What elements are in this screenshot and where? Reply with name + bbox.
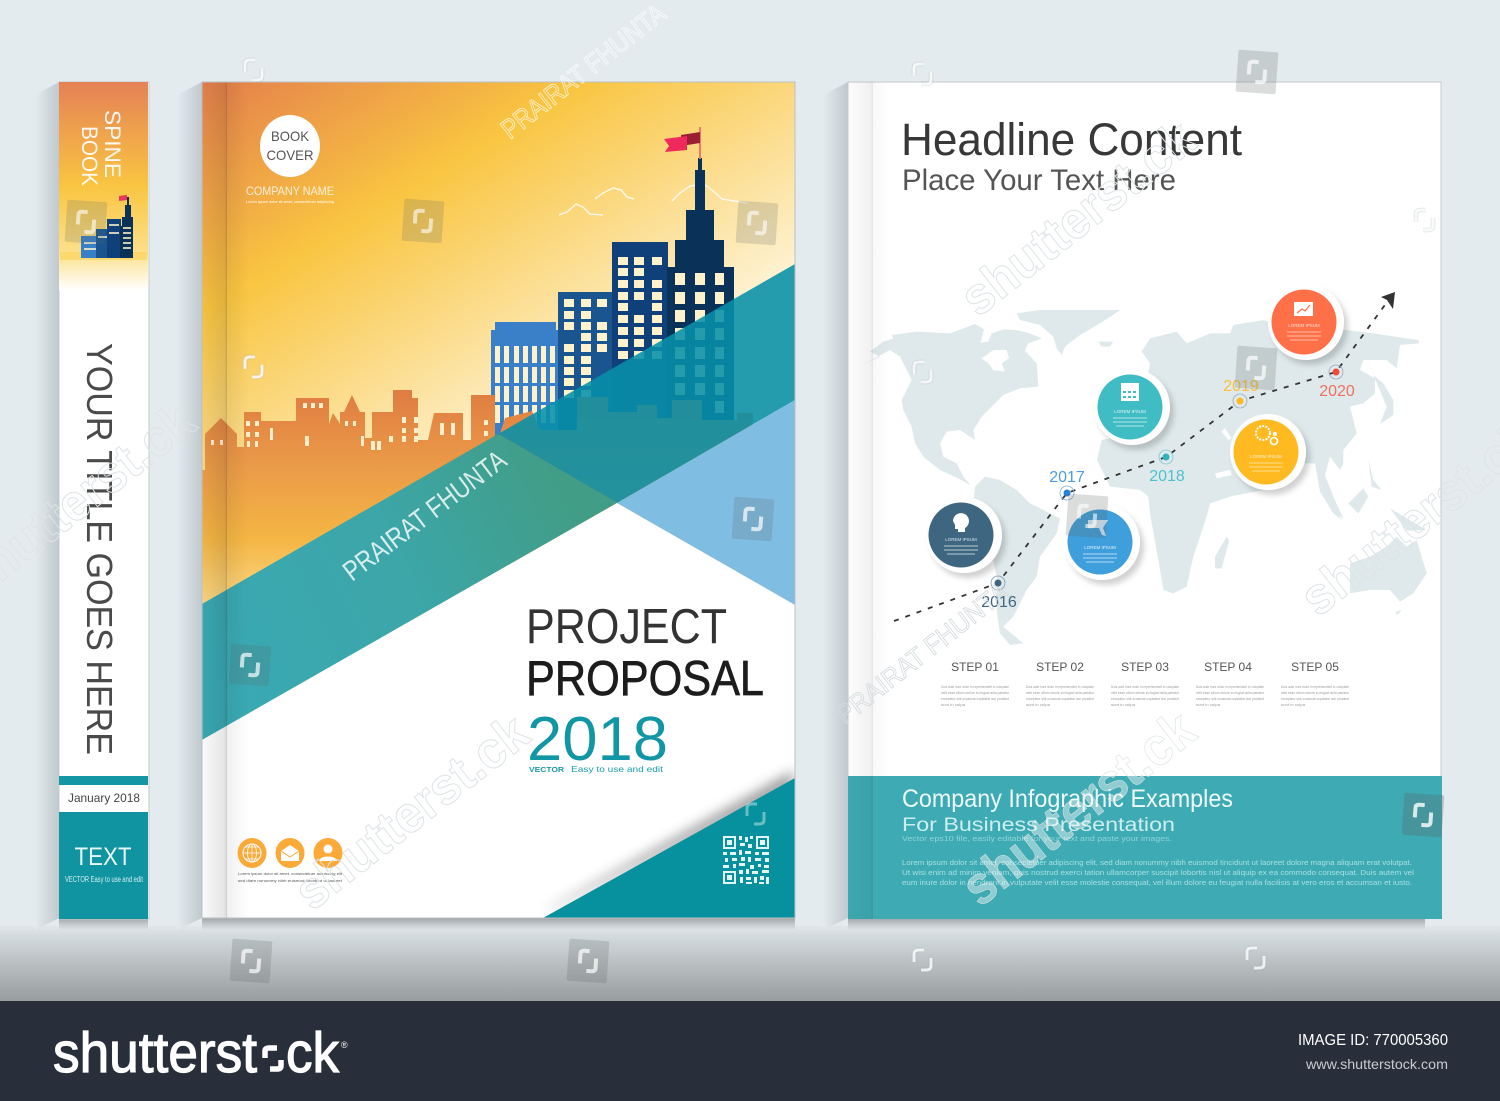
lower sky gradient (202, 470, 802, 620)
fold shadow (543, 770, 795, 912)
step descriptions: Duis aute irure dolor in reprehenderit in voluptate (941, 684, 1010, 689)
subheadline: Place Your Text Here (902, 164, 1176, 197)
step descriptions: velit esse cillum dolore eu fugiat nulla pariatur (941, 690, 1010, 695)
book shadows (35, 82, 1425, 930)
spine gradient header (59, 82, 148, 290)
step circle: yellow: LOREM IPSUM (1250, 454, 1282, 459)
footer paragraph: eum iriure dolor in hendrerit in vulputate velit esse molestie consequat, vel illum dolore eu feugiat nulla facilisis at vero eros et accumsan et iusto. (902, 878, 1412, 887)
panel: inside page (848, 82, 1442, 919)
step circle: orange (1268, 284, 1344, 360)
step descriptions: sunt in culpa (1026, 702, 1051, 707)
city: navy building (612, 242, 668, 432)
watermark text: shutterst.ck (950, 698, 1207, 917)
map: americas and greenland (862, 310, 1121, 645)
step descriptions: velit esse cillum dolore eu fugiat nulla pariatur (1196, 690, 1265, 695)
footer paragraph: Lorem ipsum dolor sit amet, consectetuer adipiscing elit, sed diam nonummy nibh euismod tincidunt ut laoreet dolore magna aliquam erat volutpat. (902, 858, 1412, 867)
icon: globe (238, 838, 266, 868)
contact text (238, 872, 342, 883)
white lower panel (202, 503, 795, 918)
company name (246, 186, 334, 204)
blue triangle (617, 400, 795, 605)
front cover border (202, 82, 795, 918)
spine heading: spine book: BOOK (77, 126, 102, 186)
footer logo: shutterst (53, 1021, 257, 1085)
year labels: 2020 (1319, 383, 1355, 400)
step circle: navy (926, 497, 1002, 573)
step circle: navy: LOREM IPSUM (945, 537, 977, 542)
timeline marker 2020 (1329, 365, 1343, 379)
headline: Headline Content (901, 114, 1242, 165)
contact text: sed diam nonummy nibh euismod tincidunt ut laoreet (238, 878, 343, 883)
band watermark text: PRAIRAT FHUNTA (337, 444, 512, 587)
step descriptions: velit esse cillum dolore eu fugiat nulla pariatur (1026, 690, 1095, 695)
year labels (981, 378, 1355, 611)
spine heading: spine book: SPINE (100, 110, 125, 178)
year labels: 2017 (1049, 469, 1085, 486)
watermark author text (495, 0, 1014, 730)
step labels: STEP 05 (1291, 660, 1339, 674)
timeline marker 2017 (1060, 486, 1074, 500)
year labels: 2016 (981, 594, 1017, 611)
step descriptions: Duis aute irure dolor in reprehenderit in voluptate (1281, 684, 1350, 689)
footer note: Vector eps10 file, easily editable for your text and paste your images. (902, 836, 1172, 843)
panel: front cover (202, 82, 802, 918)
panel: spine (59, 82, 149, 919)
footer heading: Company Infographic Examples (902, 785, 1233, 813)
watermark tiles (65, 50, 1444, 983)
step descriptions: velit esse cillum dolore eu fugiat nulla pariatur (1111, 690, 1180, 695)
vector note: VECTOR (529, 765, 565, 774)
step descriptions: sunt in culpa (1196, 702, 1221, 707)
step circle: blue: LOREM IPSUM (1084, 545, 1116, 550)
step labels: STEP 01 (951, 660, 999, 674)
spine block label: TEXT (74, 843, 132, 871)
spine teal block (59, 812, 148, 919)
step circle: orange: LOREM IPSUM (1288, 323, 1320, 328)
footer logo: ck (286, 1021, 339, 1085)
spine title: YOUR TITLE GOES HERE (79, 343, 120, 755)
floor gradient (0, 926, 1500, 1001)
teal diagonal band right (498, 264, 795, 503)
watermark text: shutterst.ck (950, 109, 1206, 327)
logo badge: COVER (266, 147, 314, 163)
step descriptions (941, 684, 1350, 707)
step descriptions: excepteur sint occaecat cupidatat non proident (941, 696, 1010, 701)
vector note: Easy to use and edit (571, 764, 664, 774)
page hinge (848, 82, 873, 919)
timeline marker 2016 (991, 576, 1005, 590)
page hinge highlight (873, 82, 889, 776)
timeline dashed arrow (894, 292, 1395, 621)
company name: COMPANY NAME (246, 184, 334, 198)
step descriptions: excepteur sint occaecat cupidatat non proident (1196, 696, 1265, 701)
step labels (951, 660, 1339, 674)
website: www.shutterstock.com (1305, 1056, 1448, 1072)
city: light blue building (491, 322, 558, 436)
spine heading: spine book (77, 110, 125, 186)
teal footer panel (848, 776, 1442, 919)
contact icons (238, 838, 342, 868)
step circle: blue (1064, 504, 1140, 580)
step descriptions: Duis aute irure dolor in reprehenderit in voluptate (1026, 684, 1095, 689)
watermark text (0, 109, 1500, 921)
logo badge: BOOK (271, 128, 310, 144)
teal diagonal band left (202, 434, 617, 740)
map: eurasia, africa and australia (1097, 320, 1427, 616)
footer subheading: For Business Presentation (902, 815, 1175, 836)
year labels: 2019 (1223, 378, 1259, 395)
teal corner triangle (543, 778, 795, 918)
company name: Lorem ipsum dolor sit amet, consectetuer adipiscing (246, 200, 334, 204)
step descriptions: velit esse cillum dolore eu fugiat nulla pariatur (1281, 690, 1350, 695)
step labels: STEP 04 (1204, 660, 1252, 674)
step circle: teal: LOREM IPSUM (1114, 409, 1146, 414)
spine mini city icon (60, 195, 147, 260)
timeline marker 2019 (1233, 394, 1247, 408)
title: project: PROJECT (526, 600, 727, 654)
step descriptions: sunt in culpa (1281, 702, 1306, 707)
footer bar (0, 1001, 1500, 1101)
footer paragraph (902, 858, 1414, 887)
icon: mail (276, 838, 304, 868)
spine date: January 2018 (68, 791, 140, 805)
world map (862, 310, 1427, 645)
timeline marker 2018 (1159, 450, 1173, 464)
year labels: 2018 (1149, 468, 1185, 485)
QR code (723, 836, 769, 884)
vector note (529, 766, 663, 774)
city: orange skyline (205, 390, 753, 470)
step descriptions: excepteur sint occaecat cupidatat non proident (1026, 696, 1095, 701)
step labels: STEP 02 (1036, 660, 1084, 674)
image id: IMAGE ID: 770005360 (1298, 1032, 1448, 1049)
step descriptions: sunt in culpa (941, 702, 966, 707)
footer paragraph: Ut wisi enim ad minim veniam, quis nostrud exerci tation ullamcorper suscipit lobortis nisl ut aliquip ex ea commodo consequat. Duis autem vel (902, 868, 1414, 877)
title: year: 2018 (527, 705, 668, 774)
city: tower with flag (664, 127, 734, 432)
watermark author text: PRAIRAT FHUNTA (830, 577, 1014, 730)
step circle: yellow (1230, 414, 1306, 490)
clouds (559, 184, 747, 215)
city: mid blue building (558, 292, 612, 430)
icon: person (314, 838, 342, 868)
hinge highlight (227, 82, 237, 918)
step descriptions: Duis aute irure dolor in reprehenderit in voluptate (1196, 684, 1265, 689)
footer logo: ® (341, 1040, 348, 1050)
contact text: Lorem ipsum dolor sit amet, consectetuer adipiscing elit (238, 871, 343, 876)
step circle: teal (1094, 369, 1170, 445)
title: proposal: PROPOSAL (526, 652, 764, 706)
step labels: STEP 03 (1121, 660, 1169, 674)
watermark text: shutterst.ck (284, 703, 540, 921)
step descriptions: excepteur sint occaecat cupidatat non proident (1111, 696, 1180, 701)
spine vector note: VECTOR Easy to use and edit (65, 875, 144, 884)
spine teal strip (59, 776, 148, 785)
step descriptions: Duis aute irure dolor in reprehenderit in voluptate (1111, 684, 1180, 689)
hinge shading (206, 82, 227, 918)
watermark brackets (245, 60, 1433, 970)
step descriptions: excepteur sint occaecat cupidatat non proident (1281, 696, 1350, 701)
step descriptions: sunt in culpa (1111, 702, 1136, 707)
logo badge (260, 115, 320, 177)
